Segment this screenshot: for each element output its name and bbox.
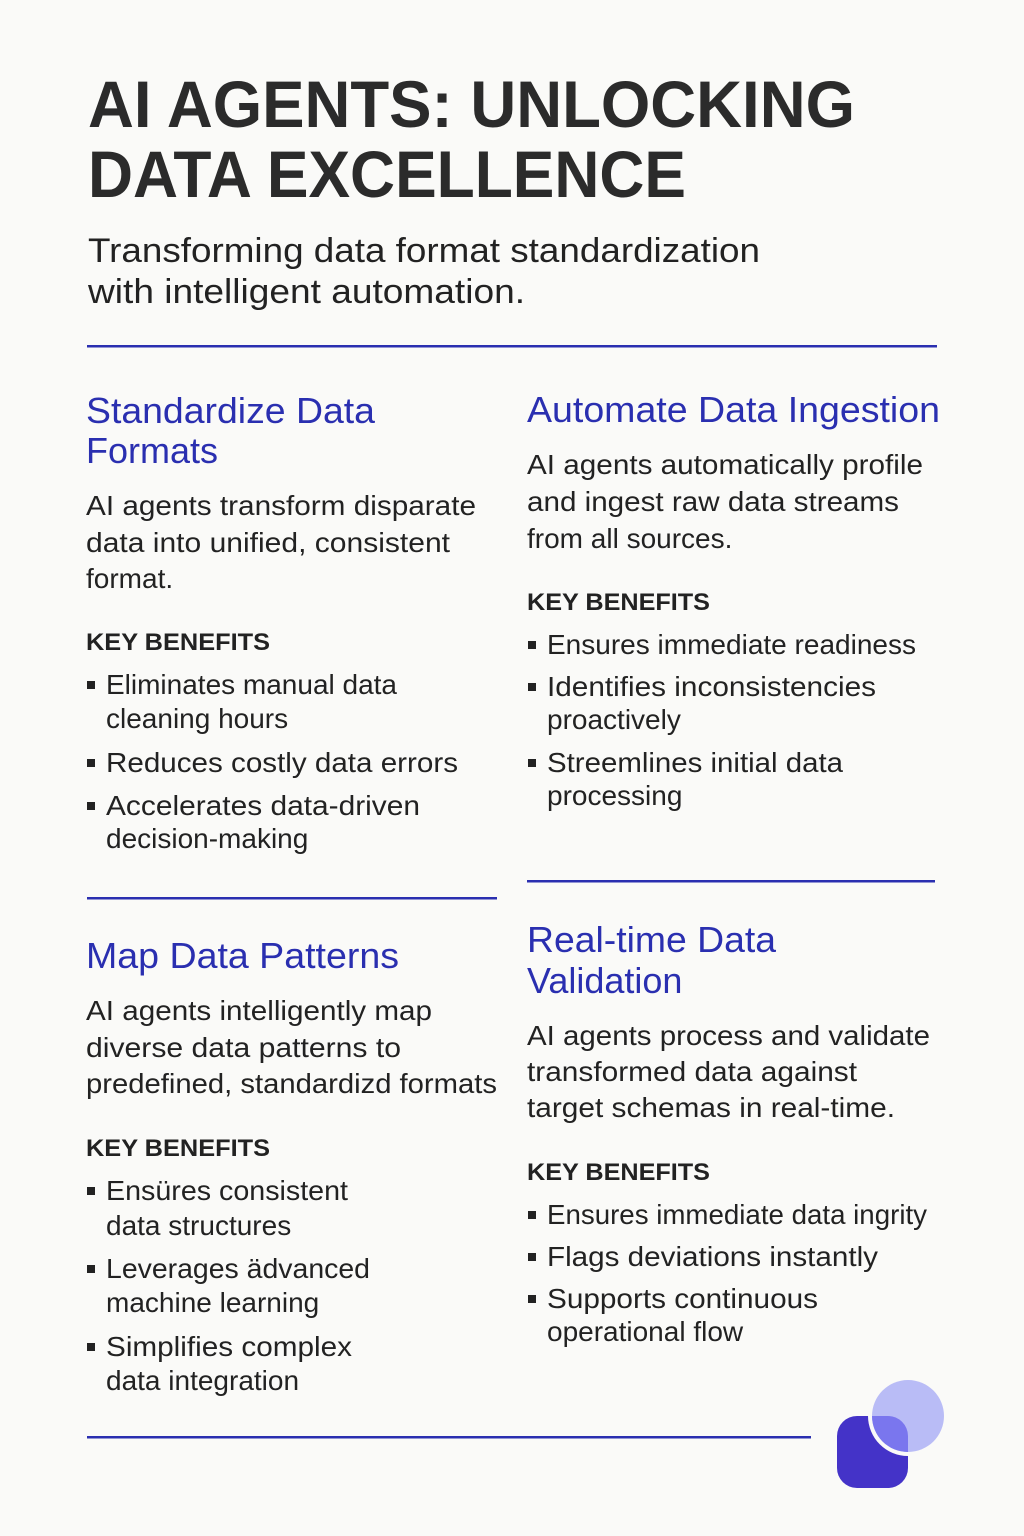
subtitle: Transforming data format standardization <box>88 232 760 270</box>
text: automate description: from all sources. <box>527 523 732 554</box>
key benefits: automate: Identifies inconsistencies <box>547 671 876 702</box>
key benefits: validation: KEY BENEFITS <box>527 1159 710 1186</box>
key benefits: validation <box>527 1159 927 1347</box>
key benefits: validation: Ensures immediate data ingrity <box>547 1199 927 1230</box>
key benefits: map: data structures <box>106 1210 291 1241</box>
subtitle <box>87 232 760 311</box>
text: validation description: AI agents process and validate <box>527 1020 930 1051</box>
text: map description <box>86 995 497 1099</box>
key benefits: validation: Flags deviations instantly <box>547 1241 878 1272</box>
key benefits: validation: Supports continuous <box>547 1283 818 1314</box>
text: validation description: target schemas in real-time. <box>527 1092 895 1123</box>
key benefits: standardize: KEY BENEFITS <box>86 629 270 656</box>
text: map description: AI agents intelligently map <box>86 995 432 1026</box>
key benefits: map: Simplifies complex <box>106 1331 352 1362</box>
text: automate description: AI agents automatically profile <box>527 449 923 480</box>
key benefits: standardize <box>86 629 458 854</box>
key benefits: automate: processing <box>547 780 682 811</box>
heading: standardize: Formats <box>86 430 218 471</box>
text: standardize description <box>86 490 476 594</box>
icon: logo <box>837 1376 948 1488</box>
text: standardize description: AI agents transform disparate <box>86 490 476 521</box>
key benefits: automate: Ensures immediate readiness <box>547 629 916 660</box>
key benefits: automate: proactively <box>547 704 681 735</box>
key benefits: map: Ensüres consistent <box>106 1175 348 1206</box>
key benefits: standardize: decision-making <box>106 823 308 854</box>
key benefits: standardize: Accelerates data-driven <box>106 790 420 821</box>
key benefits: map: KEY BENEFITS <box>86 1135 270 1162</box>
panel: automate data ingestion <box>527 389 940 811</box>
heading: validation <box>527 919 777 1001</box>
panel: real-time data validation <box>527 919 930 1347</box>
key benefits: standardize: Eliminates manual data <box>106 669 397 700</box>
heading: standardize: Standardize Data <box>86 390 376 431</box>
text: validation description <box>527 1020 930 1123</box>
heading: standardize <box>86 390 376 471</box>
title: AI AGENTS: UNLOCKING <box>88 67 855 141</box>
heading: validation: Real-time Data <box>527 919 777 960</box>
heading: validation: Validation <box>527 960 682 1001</box>
key benefits: automate: Streemlines initial data <box>547 747 843 778</box>
text: automate description: and ingest raw data streams <box>527 486 899 517</box>
key benefits: standardize: Reduces costly data errors <box>106 747 458 778</box>
text: standardize description: data into unified, consistent <box>86 527 450 558</box>
title <box>88 67 855 211</box>
text: map description: predefined, standardizd formats <box>86 1068 497 1099</box>
title: DATA EXCELLENCE <box>88 137 686 211</box>
key benefits: validation: operational flow <box>547 1316 744 1347</box>
text: map description: diverse data patterns to <box>86 1032 401 1063</box>
panel: map data patterns <box>86 935 497 1396</box>
key benefits: map <box>86 1135 370 1396</box>
key benefits: map: machine learning <box>106 1287 319 1318</box>
key benefits: map: data integration <box>106 1365 299 1396</box>
panel: standardize data formats <box>86 390 476 854</box>
key benefits: automate: KEY BENEFITS <box>527 589 710 616</box>
subtitle: with intelligent automation. <box>87 273 525 311</box>
text: automate description <box>527 449 923 554</box>
heading: map: Map Data Patterns <box>86 935 399 976</box>
text: validation description: transformed data against <box>527 1056 857 1087</box>
key benefits: standardize: cleaning hours <box>106 703 288 734</box>
key benefits: map: Leverages ädvanced <box>106 1253 370 1284</box>
heading: automate: Automate Data Ingestion <box>527 389 940 430</box>
text: standardize description: format. <box>86 563 173 594</box>
key benefits: automate <box>527 589 916 811</box>
